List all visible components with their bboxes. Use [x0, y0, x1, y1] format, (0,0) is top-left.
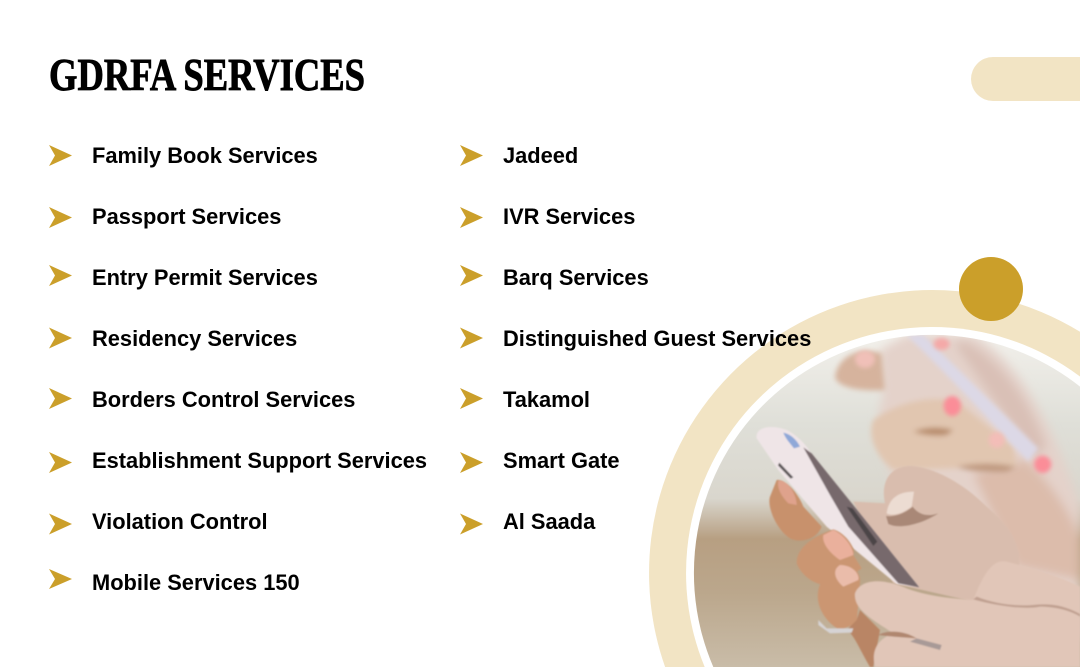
arrow bullet — [460, 328, 483, 348]
foreground palm and thumb — [853, 466, 1019, 602]
foreground fingers — [769, 480, 1080, 667]
pink fingernails, blurred — [855, 338, 1051, 473]
service label: Distinguished Guest Services — [503, 326, 811, 351]
arrow bullet — [460, 514, 483, 534]
arrow bullet — [49, 514, 72, 534]
decorative pill: top right — [971, 57, 1080, 101]
arrow bullet — [49, 328, 72, 348]
arrow bullet — [460, 388, 483, 409]
service label: IVR Services — [503, 204, 635, 229]
background hand, blurred — [879, 335, 1080, 640]
service label: Violation Control — [92, 509, 268, 534]
service label: Jadeed — [503, 143, 578, 168]
arrow bullet — [460, 452, 483, 473]
service label: Mobile Services 150 — [92, 570, 300, 595]
front hand — [855, 561, 1080, 667]
arrow bullet — [49, 207, 72, 228]
service label: Residency Services — [92, 326, 297, 351]
list: right column services — [460, 143, 811, 534]
service label: Family Book Services — [92, 143, 318, 168]
ring: white inner border — [686, 327, 1080, 667]
arrow bullet — [49, 388, 72, 409]
decorative gold circle — [959, 257, 1023, 321]
foreground phone — [757, 427, 919, 587]
arrow bullet — [49, 452, 72, 473]
arrow bullet — [49, 569, 72, 589]
ring: beige circle — [649, 290, 1080, 667]
arrow bullet — [460, 145, 483, 166]
arrow bullet — [460, 265, 483, 286]
service label: Takamol — [503, 387, 590, 412]
background phone, blurred — [907, 335, 1038, 462]
service label: Establishment Support Services — [92, 448, 427, 473]
service label: Smart Gate — [503, 448, 620, 473]
service label: Al Saada — [503, 509, 596, 534]
arrow bullet — [460, 207, 483, 228]
arrow bullet — [49, 145, 72, 166]
list: left column services — [49, 143, 427, 595]
ring on finger — [818, 620, 853, 633]
photo: hands holding smartphones — [690, 330, 1080, 667]
service label: Barq Services — [503, 265, 649, 290]
arrow bullet — [49, 265, 72, 286]
service label: Passport Services — [92, 204, 281, 229]
service label: Entry Permit Services — [92, 265, 318, 290]
title: GDRFA SERVICES — [49, 49, 365, 100]
service label: Borders Control Services — [92, 387, 355, 412]
